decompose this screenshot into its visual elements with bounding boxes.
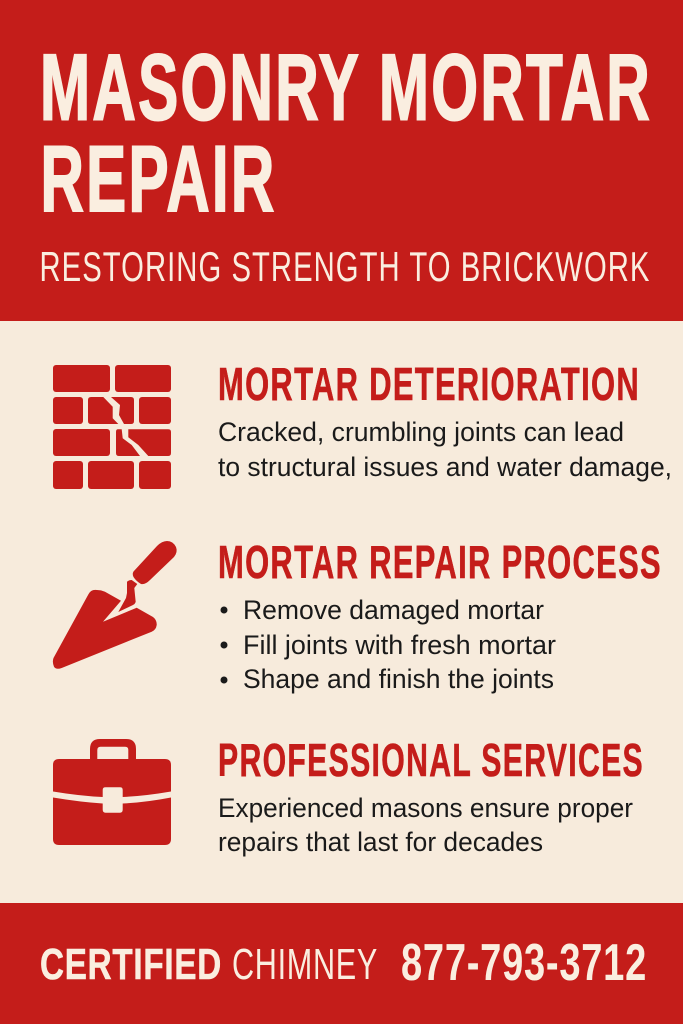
title <box>40 34 652 231</box>
description: repairs that last for decades <box>218 827 543 857</box>
description <box>218 417 672 482</box>
footer banner <box>0 903 683 1024</box>
brand name: CERTIFIED <box>40 940 222 989</box>
description: Cracked, crumbling joints can lead <box>218 417 624 447</box>
bullet list: Shape and finish the joints <box>243 664 554 694</box>
bullet list: Fill joints with fresh mortar <box>243 630 556 660</box>
section: mortar deterioration <box>218 358 672 482</box>
header banner <box>0 0 683 321</box>
description: Experienced masons ensure proper <box>218 793 633 823</box>
brand name: CHIMNEY <box>232 940 378 989</box>
description: to structural issues and water damage, <box>218 452 672 482</box>
icon: briefcase <box>53 739 171 845</box>
title: REPAIR <box>40 126 276 231</box>
icon: cracked brick wall <box>53 365 171 489</box>
icon: trowel <box>53 541 177 669</box>
bullet list: Remove damaged mortar <box>243 595 544 625</box>
bullet list <box>220 595 556 694</box>
description <box>218 793 633 857</box>
section: professional services <box>218 734 644 857</box>
section: mortar repair process <box>218 536 662 694</box>
